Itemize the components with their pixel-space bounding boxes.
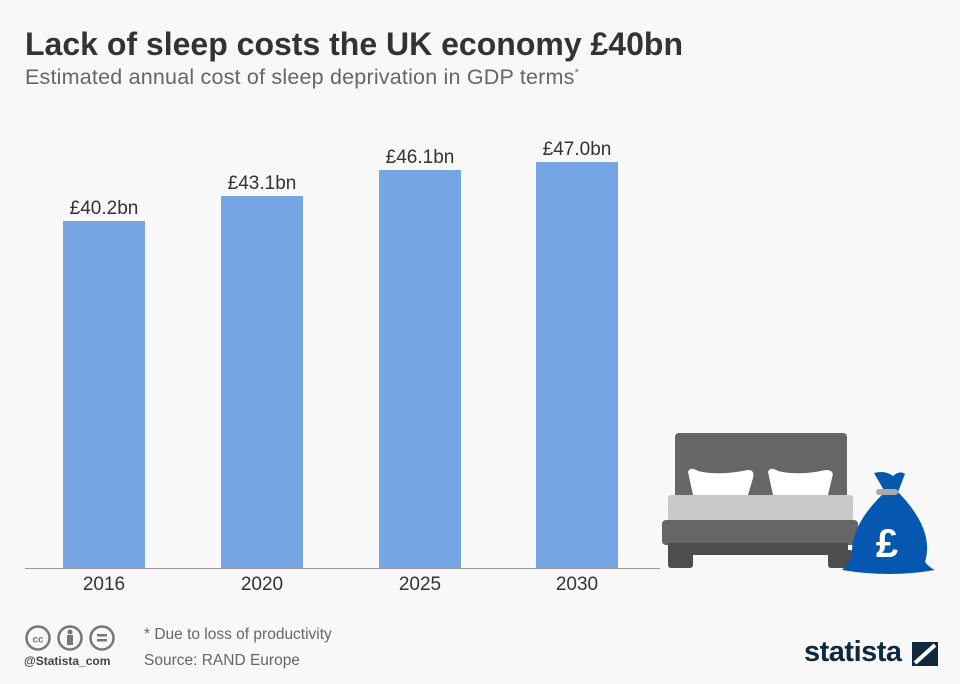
statista logo: statista	[804, 636, 902, 668]
bar chart: £43.1bn	[228, 173, 296, 194]
x-axis labels: 2020	[241, 574, 283, 595]
icon: bed and money bag: £	[876, 522, 898, 566]
x-axis labels: 2025	[399, 574, 441, 595]
bar 2030	[536, 162, 618, 568]
bar chart: £40.2bn	[70, 198, 138, 219]
bar 2025	[379, 170, 461, 568]
x-axis labels	[83, 574, 598, 595]
source: Source: RAND Europe	[144, 652, 300, 669]
x-axis labels: 2016	[83, 574, 125, 595]
icon: bed and money bag	[662, 433, 935, 574]
title: Lack of sleep costs the UK economy £40bn	[25, 26, 683, 62]
footnote: * Due to loss of productivity	[144, 626, 332, 643]
icon: cc licence	[25, 625, 115, 651]
x-axis labels: 2030	[556, 574, 598, 595]
bar 2020	[221, 196, 303, 568]
subtitle: Estimated annual cost of sleep deprivation in GDP terms*	[25, 65, 579, 89]
handle: @Statista_com	[24, 654, 110, 668]
bar chart: £47.0bn	[543, 139, 611, 160]
bar chart	[25, 139, 660, 569]
bar chart: £46.1bn	[386, 147, 454, 168]
icon: cc licence: cc	[32, 634, 44, 646]
bar 2016	[63, 221, 145, 568]
